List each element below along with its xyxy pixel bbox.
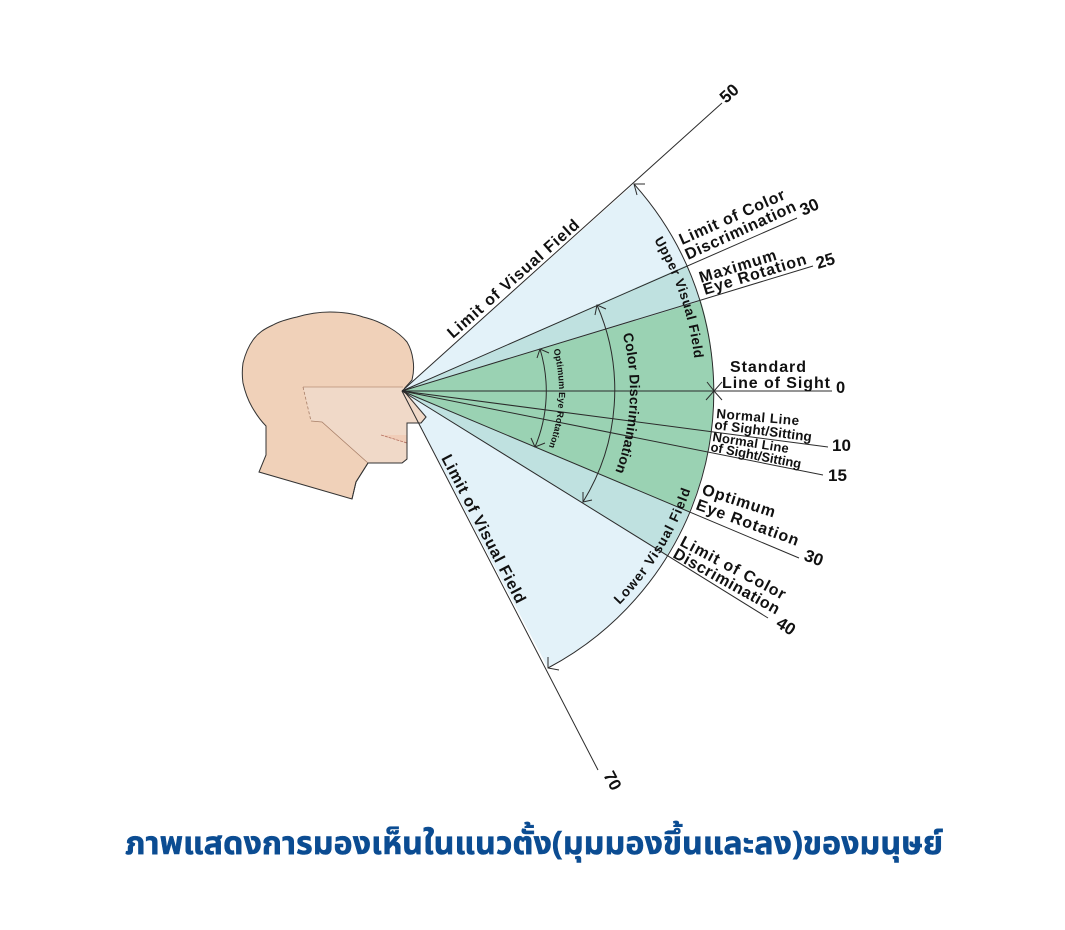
label: optimum eye rotation arc: Optimum Eye Rotation: [549, 349, 566, 448]
label: maximum eye rotation: Eye Rotation: [701, 251, 808, 299]
label: standard line of sight: [722, 359, 831, 392]
label: color discrimination: Color Discrimination: [616, 333, 640, 473]
mouth: [381, 435, 407, 443]
color discrimination arc: [583, 305, 615, 502]
label: limit of color lower: Discrimination: [670, 546, 782, 618]
label: standard line of sight: Line of Sight: [722, 375, 831, 392]
face area: [303, 387, 426, 463]
label: lower 30: 30: [802, 546, 826, 570]
label: upper 30: 30: [797, 195, 822, 220]
label: upper visual field: Upper Visual Field: [656, 236, 704, 358]
label: 40: 40: [773, 613, 799, 639]
panel: color discrimination sector: [402, 265, 714, 555]
label: normal line sitting 15: of Sight/Sitting: [709, 439, 803, 471]
outer arc with arrows: [548, 184, 722, 670]
optimum eye rotation arc: [531, 349, 549, 447]
label: standard line of sight: Standard: [730, 359, 806, 376]
label: limit of color lower: Limit of Color: [677, 534, 788, 603]
panel: limit of visual field sector: [402, 184, 714, 668]
icon: human head profile: [242, 312, 426, 499]
label: 50: 50: [716, 80, 743, 107]
label: 0: 0: [836, 379, 845, 397]
label: limit of visual field lower: Limit of Visual Field: [437, 452, 528, 606]
label: 15: 15: [828, 466, 847, 485]
label: optimum eye rotation: Optimum: [700, 482, 777, 521]
label: normal line sitting 10: of Sight/Sitting: [714, 417, 813, 444]
label: limit of visual field upper: Limit of Visual Field: [444, 217, 583, 342]
label: optimum eye rotation: Eye Rotation: [694, 497, 801, 550]
label: normal line sitting 10: Normal Line: [716, 406, 800, 428]
label: limit of color upper: Discrimination: [683, 198, 799, 264]
label: 10: 10: [832, 436, 851, 455]
panel: eye rotation sector: [402, 301, 714, 512]
label: 25: 25: [814, 249, 837, 273]
label: normal line sitting 15: Normal Line: [712, 429, 790, 456]
label: lower visual field: Lower Visual Field: [614, 488, 690, 604]
label: limit of color upper: Limit of Color: [677, 187, 788, 249]
title: ภาพแสดงการมองเห็นในแนวตั้ง(มุมมองขึ้นและลง)ของมนุษย์: [125, 820, 943, 869]
angle lines: [402, 103, 832, 770]
label: maximum eye rotation: Maximum: [697, 247, 779, 287]
label: 70: 70: [599, 768, 625, 794]
